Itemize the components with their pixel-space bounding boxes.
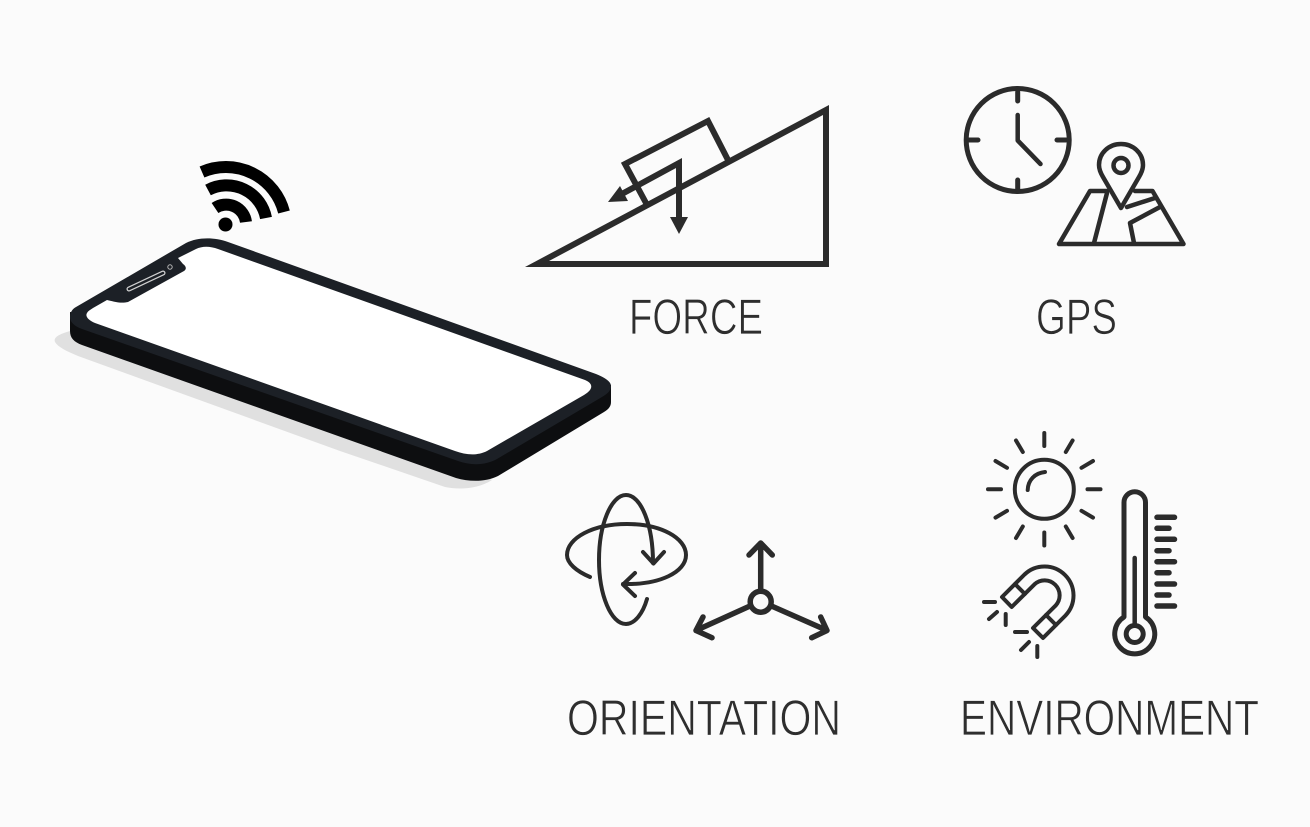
phone screen [86, 247, 591, 454]
thermometer scale [1157, 517, 1174, 606]
sliding block [625, 121, 728, 203]
location pin [1099, 144, 1143, 208]
label: FORCE: FORCE [629, 289, 763, 345]
label: GPS: GPS [1036, 289, 1117, 345]
icon: clock [966, 88, 1069, 192]
phone side edge [70, 312, 611, 481]
icon: map with location pin [1059, 144, 1184, 244]
label: ORIENTATION: ORIENTATION [567, 690, 841, 746]
icon: thermometer [1115, 492, 1174, 654]
icon: rotation ellipses [567, 495, 686, 624]
icon: wifi signal [202, 167, 284, 232]
incline triangle [537, 110, 826, 264]
icon: magnet [984, 567, 1073, 657]
force arrows [608, 163, 688, 234]
phone speaker [129, 273, 163, 289]
icon: sun [988, 433, 1100, 546]
icon: force on inclined plane [537, 110, 826, 264]
icon: smartphone lying flat [55, 238, 611, 489]
icon: three axes [696, 543, 827, 638]
phone shadow [55, 331, 492, 489]
phone top face [70, 238, 611, 464]
phone camera [168, 265, 172, 269]
